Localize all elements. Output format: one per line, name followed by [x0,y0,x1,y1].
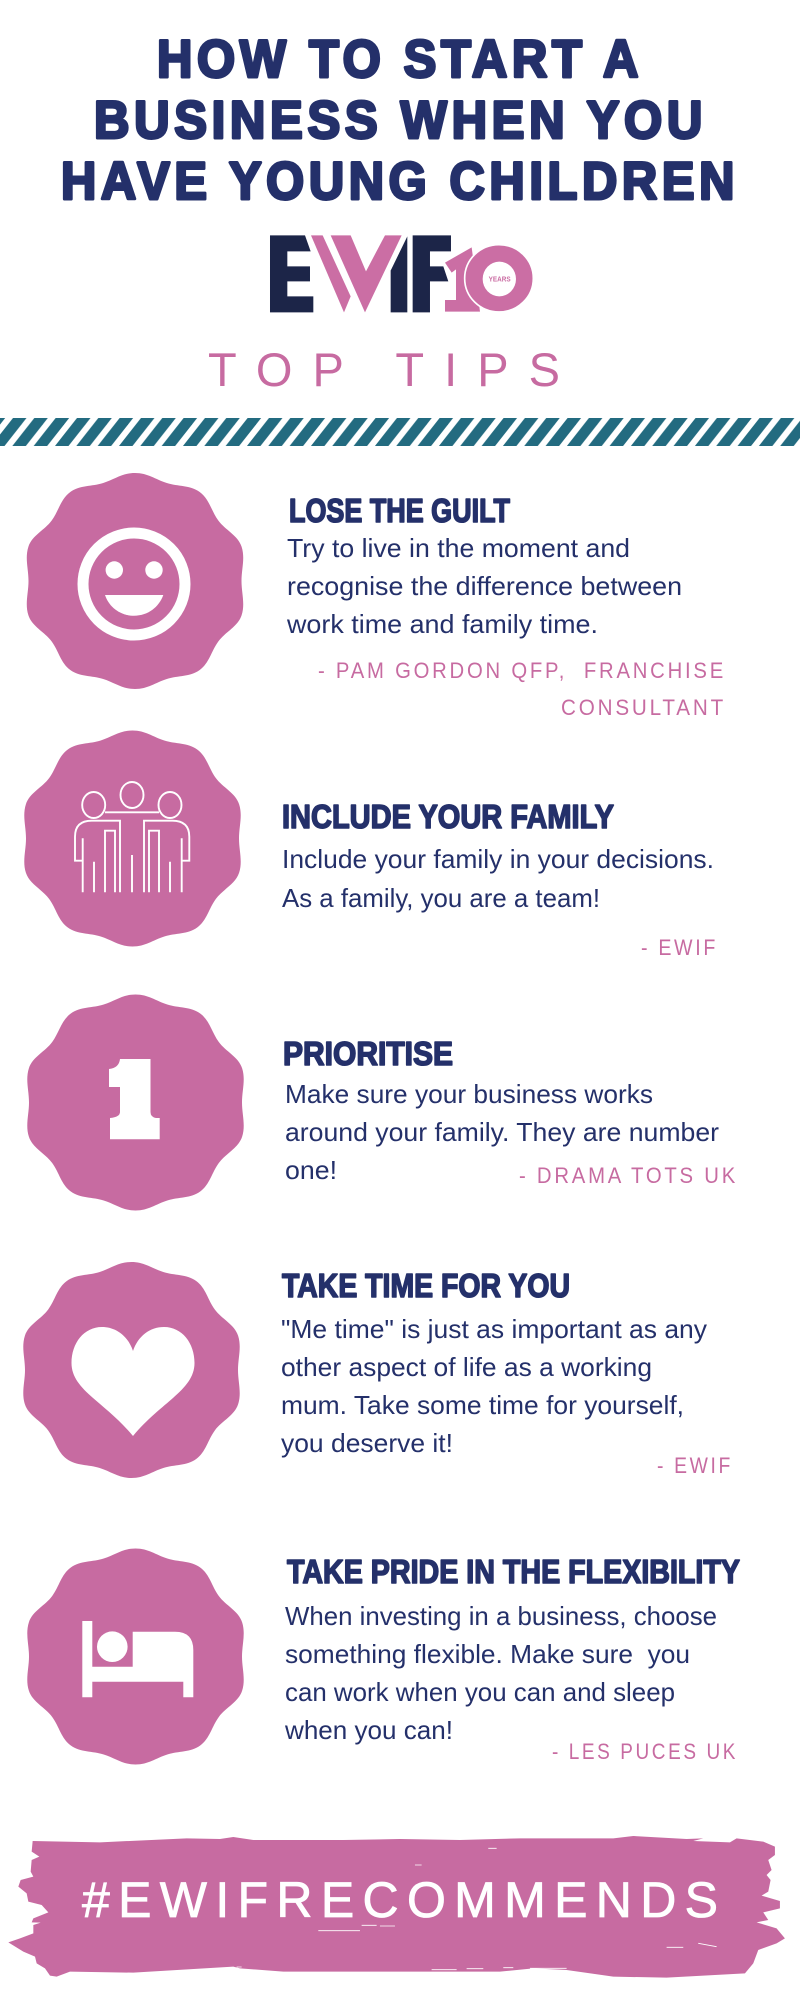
attribution: CONSULTANT [561,695,726,720]
tip heading: LOSE THE GUILT [289,492,510,529]
badge 5 [27,1548,244,1764]
tip body: Make sure your business works [285,1079,653,1109]
tip heading: TAKE PRIDE IN THE FLEXIBILITY [287,1553,740,1590]
title: BUSINESS WHEN YOU [94,91,707,150]
badge 3 [27,994,244,1210]
tip body: one! [285,1155,337,1185]
logo number 10: YEARS [489,275,511,284]
stripe band [0,418,800,446]
attribution [318,658,726,720]
tip body [282,844,714,913]
icon: number one [109,1059,160,1139]
tip body: can work when you can and sleep [285,1677,675,1707]
tip body: other aspect of life as a working [281,1352,652,1382]
attribution: - EWIF [641,935,718,960]
tip body: Include your family in your decisions. [282,844,714,874]
panel: take pride in the flexibility [27,1548,740,1764]
icon: smiley [83,533,185,635]
badge 1 [27,473,243,689]
badge 2 [24,730,241,946]
tip body: you deserve it! [281,1428,453,1458]
icon: family group [75,782,189,892]
tip body [281,1314,707,1458]
tip body: "Me time" is just as important as any [281,1314,707,1344]
tip heading: TAKE TIME FOR YOU [282,1267,570,1304]
badge 4 [23,1262,240,1478]
heading: top tips: TOP TIPS [208,343,560,396]
icon: bed [82,1621,193,1697]
attribution: - DRAMA TOTS UK [519,1163,738,1188]
banner: brush stroke [8,1836,785,1978]
title: HOW TO START A [157,30,643,89]
panel: include your family [24,730,718,960]
tip heading: PRIORITISE [283,1035,453,1072]
title [61,30,739,211]
tip body: work time and family time. [286,609,598,639]
attribution: - LES PUCES UK [552,1739,738,1764]
banner text: #EWIFRECOMMENDS [82,1872,718,1928]
tip body: mum. Take some time for yourself, [281,1390,684,1420]
tip heading: INCLUDE YOUR FAMILY [282,798,614,835]
tip body: recognise the difference between [287,571,682,601]
tip body [284,1601,717,1745]
brush shape [8,1836,785,1978]
tip body: around your family. They are number [285,1117,719,1147]
logo number 10 [445,245,533,312]
logo letters [270,235,451,312]
tip body: As a family, you are a team! [282,883,600,913]
attribution: - EWIF [657,1453,733,1478]
panel: take time for you [23,1262,733,1478]
panel: lose the guilt [27,473,726,720]
attribution: - PAM GORDON QFP, FRANCHISE [318,658,726,683]
tip body: something flexible. Make sure you [285,1639,690,1669]
tip body: When investing in a business, choose [285,1601,717,1631]
icon: heart [72,1327,194,1436]
title: HAVE YOUNG CHILDREN [61,152,739,211]
logo: EWIF 10 years [270,235,533,312]
tip body: when you can! [284,1715,453,1745]
tip body: Try to live in the moment and [287,533,630,563]
tip body [285,1079,719,1185]
tip body [286,533,682,639]
panel: prioritise [27,994,738,1210]
